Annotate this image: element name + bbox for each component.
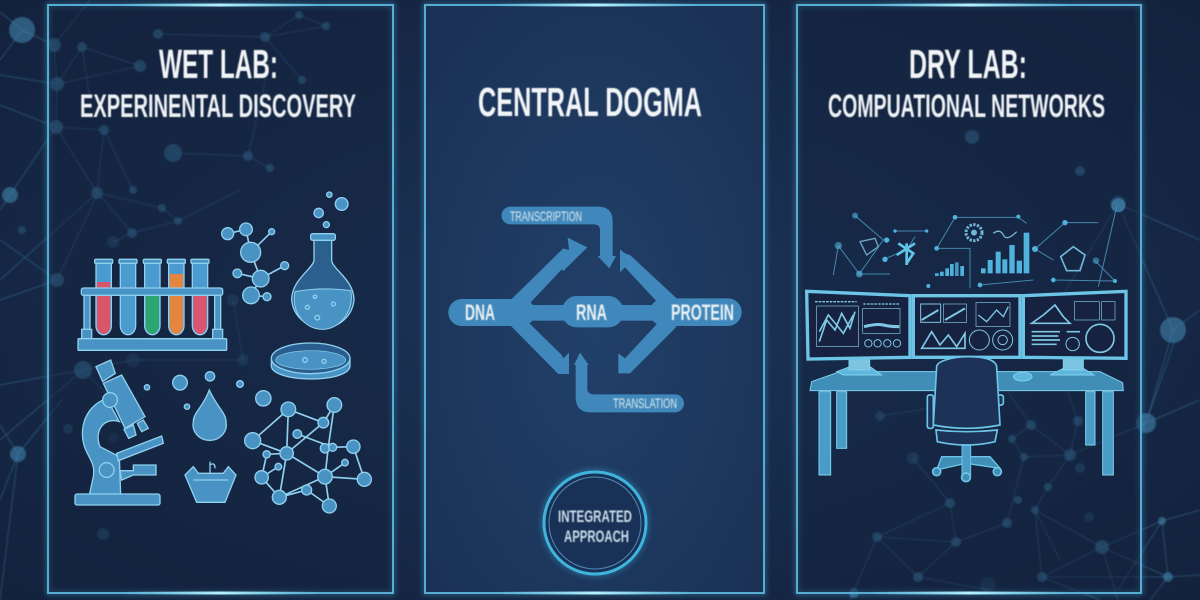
panel: dry lab [797, 4, 1141, 594]
subheading: experiential discovery: EXPERINENTAL DISCOVERY [80, 88, 356, 124]
floating data graphics [833, 198, 1125, 288]
heading: wet lab: WET LAB: [159, 41, 278, 87]
icon: petri dish [271, 343, 350, 379]
illustration: computer workstation [807, 198, 1126, 482]
badge: integrated approach: INTEGRATED [558, 507, 632, 526]
icon: plant pot [185, 462, 236, 502]
icon: test tube rack [78, 259, 227, 350]
panel: wet lab [48, 4, 393, 594]
label: protein: PROTEIN [671, 300, 734, 325]
icon: round flask [292, 192, 354, 329]
icon: molecular network [245, 391, 371, 513]
badge: integrated approach: APPROACH [564, 527, 629, 546]
icons: wet lab equipment [75, 192, 371, 513]
office chair [927, 357, 1003, 482]
heading: central dogma: CENTRAL DOGMA [478, 79, 702, 125]
heading: dry lab: DRY LAB: [909, 41, 1027, 87]
diagram: central dogma flow [448, 207, 742, 412]
arrows and nodes [448, 207, 742, 412]
label: translation: TRANSLATION [613, 395, 677, 411]
label: transcription: TRANSCRIPTION [510, 208, 582, 224]
icon: molecule small [222, 223, 289, 304]
badge: integrated approach [544, 472, 646, 574]
label: DNA: DNA [465, 300, 495, 325]
icon: microscope [75, 360, 163, 505]
panel: central dogma [425, 4, 764, 594]
desk [810, 358, 1123, 475]
label: RNA: RNA [576, 300, 607, 325]
icon: water drop and bubbles [144, 372, 243, 440]
monitors with dashboards [807, 291, 1126, 359]
